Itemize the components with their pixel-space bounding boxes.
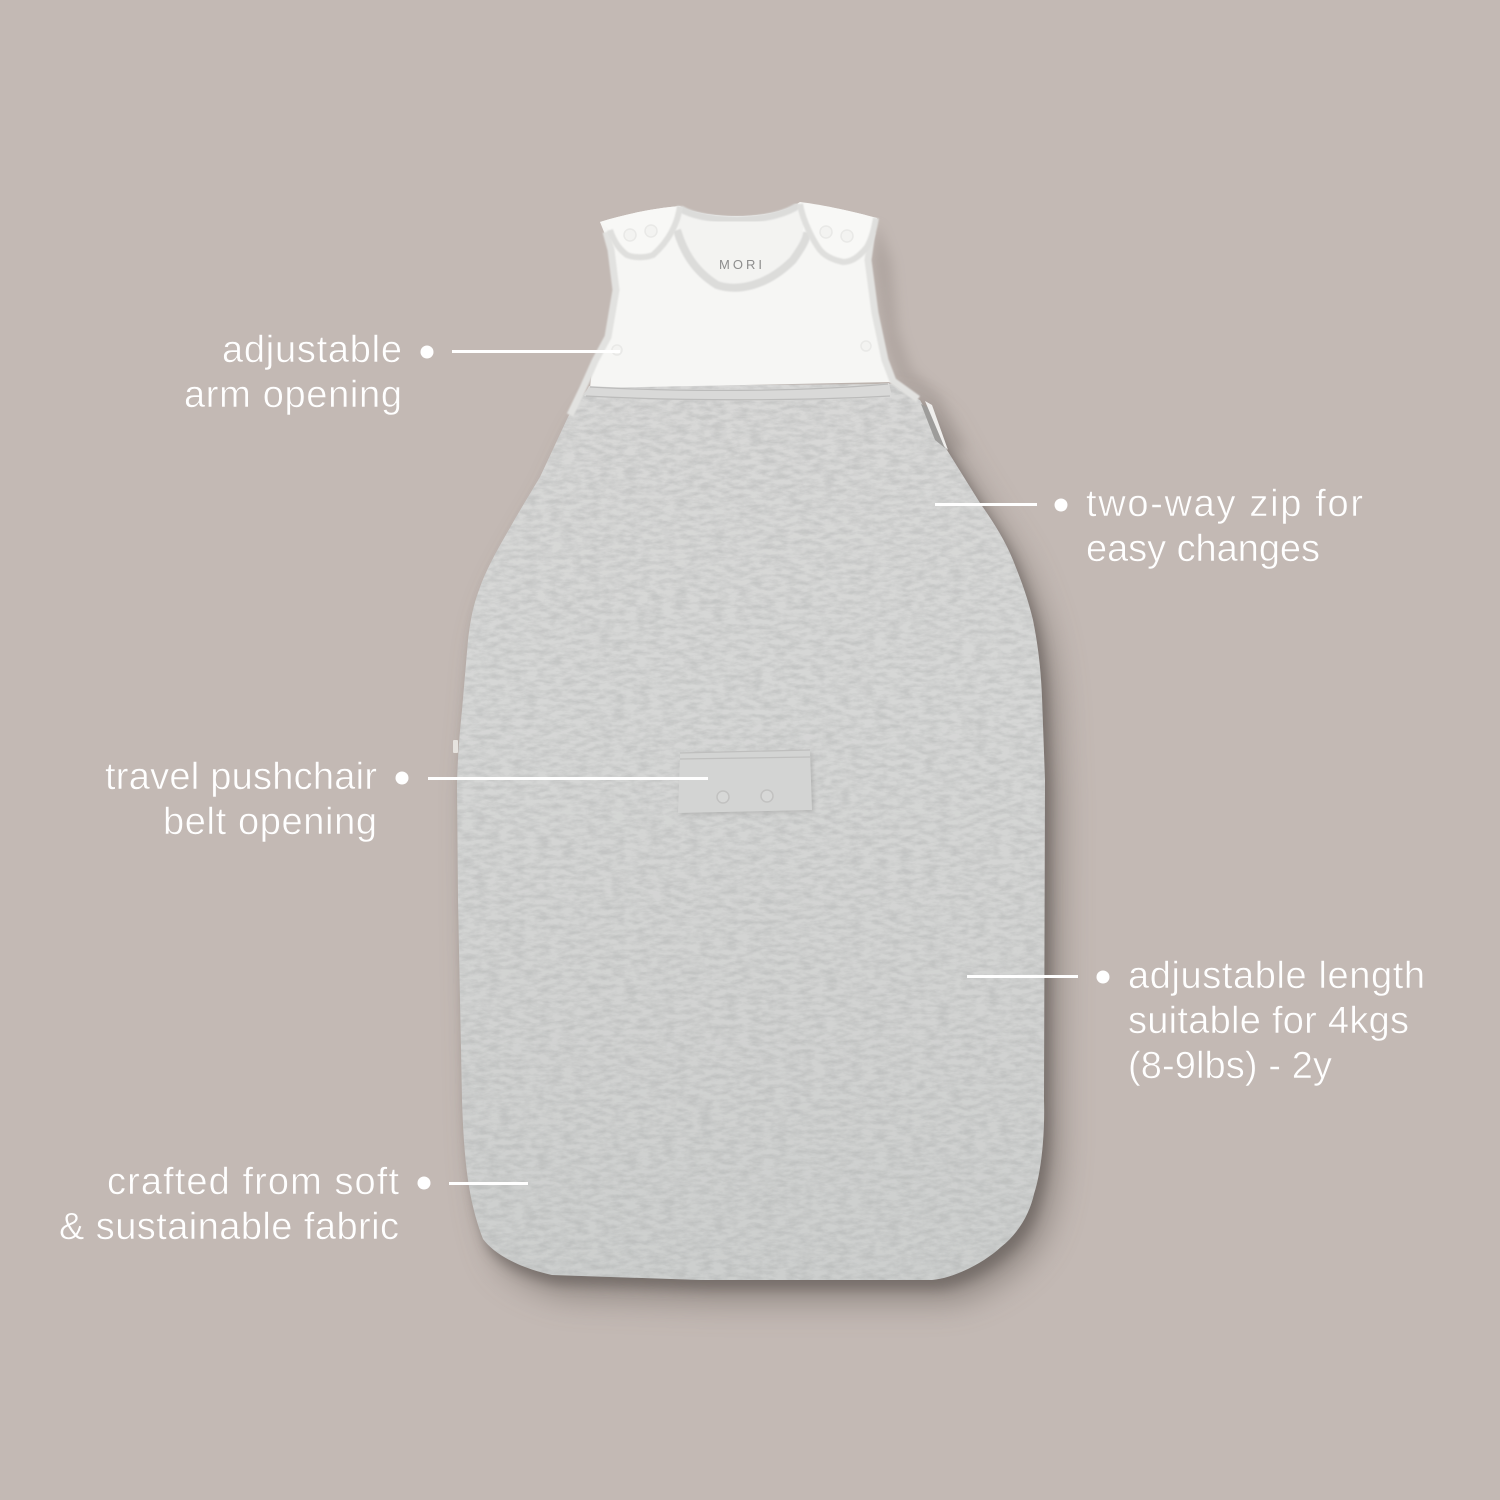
back neck binding — [681, 205, 799, 220]
brand logo: MORI — [719, 257, 762, 272]
inner back neck — [678, 205, 803, 290]
callout: adjustable arm opening — [184, 329, 620, 416]
armhole binding left — [570, 232, 616, 415]
callout: adjustable length — [967, 955, 1425, 1087]
yoke seam band — [584, 383, 892, 401]
infographic canvas — [60, 202, 1422, 1318]
callout: travel pushchair belt opening: travel pushchair — [105, 756, 377, 798]
side label tag — [453, 740, 458, 753]
callout: two-way zip: easy changes — [1086, 528, 1320, 570]
zip tab — [921, 401, 948, 450]
callout: soft and sustainable fabric: & sustainable fabric — [59, 1206, 399, 1248]
grey body — [450, 380, 1050, 1285]
callout: travel pushchair belt opening: belt opening — [163, 801, 377, 843]
white yoke with armholes and neck — [570, 202, 918, 415]
right shoulder flap — [800, 203, 876, 262]
left shoulder flap — [600, 206, 680, 257]
armhole binding right — [868, 232, 918, 399]
product: sleeping bag — [450, 202, 1061, 1302]
callout: soft and sustainable fabric: crafted from soft — [107, 1161, 399, 1203]
callout: adjustable length: suitable for 4kgs — [1128, 1000, 1409, 1042]
callout: soft and sustainable fabric — [59, 1161, 528, 1248]
callout: two-way zip: two-way zip for — [1086, 483, 1363, 525]
callout: adjustable length: (8-9lbs) - 2y — [1128, 1045, 1332, 1087]
callout: adjustable arm opening: arm opening — [184, 374, 402, 416]
callout: two-way zip — [935, 483, 1363, 570]
front neck binding — [677, 230, 807, 288]
drop shadow — [463, 222, 1061, 1302]
shoulder snaps — [612, 225, 871, 355]
flap snaps — [717, 790, 773, 803]
callout: travel pushchair belt opening — [105, 756, 708, 843]
pushchair belt flap — [678, 750, 814, 815]
callout: adjustable arm opening: adjustable — [222, 329, 402, 371]
callout: adjustable length: adjustable length — [1128, 955, 1425, 997]
